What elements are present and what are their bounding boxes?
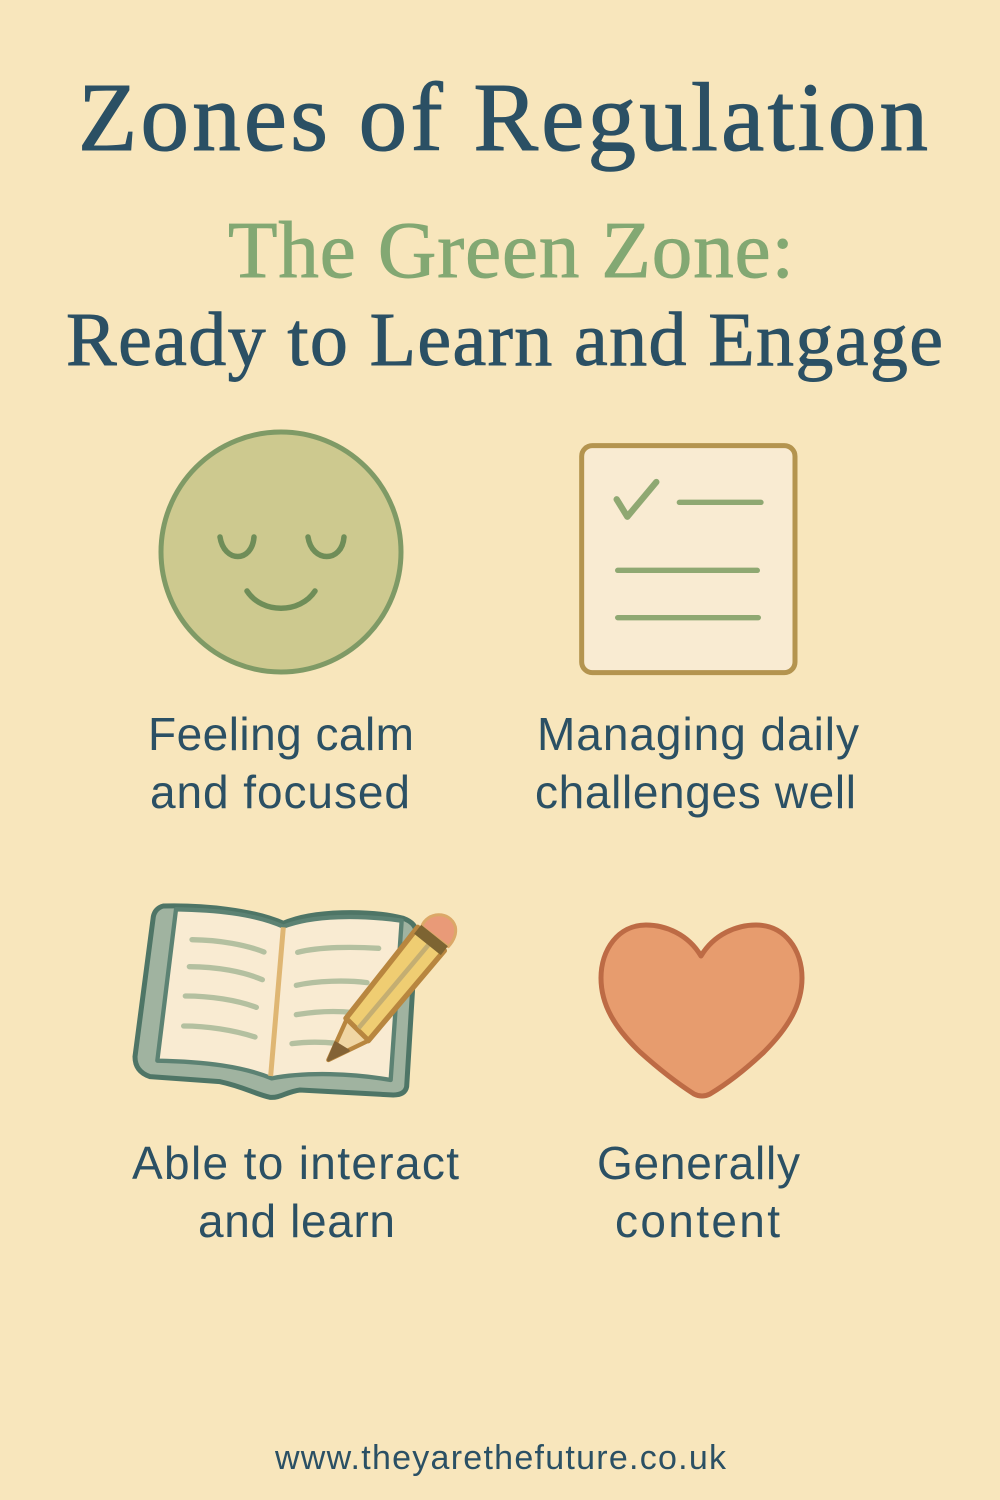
label: feeling calm and focused: Feeling calm	[148, 708, 414, 760]
icon: pencil	[328, 915, 456, 1060]
footer url: www.theyarethefuture.co.uk	[274, 1439, 727, 1477]
label: generally content: Generally	[597, 1137, 800, 1189]
icon: heart	[601, 925, 802, 1096]
icon: calm face	[161, 432, 401, 672]
label: managing daily challenges well: Managing daily	[537, 708, 859, 760]
icon: open book with pencil	[135, 906, 456, 1097]
label: feeling calm and focused: and focused	[150, 766, 410, 818]
subtitle: ready to learn and engage: Ready to Learn and Engage	[66, 298, 943, 382]
title: Zones of Regulation	[78, 64, 928, 171]
subtitle: the green zone: The Green Zone:	[228, 205, 794, 295]
icon: checklist	[582, 446, 795, 673]
label: able to interact and learn: and learn	[198, 1195, 395, 1247]
label: managing daily challenges well: challenges well	[535, 766, 856, 818]
label: able to interact and learn: Able to interact	[132, 1137, 459, 1189]
label: generally content: content	[615, 1195, 780, 1247]
